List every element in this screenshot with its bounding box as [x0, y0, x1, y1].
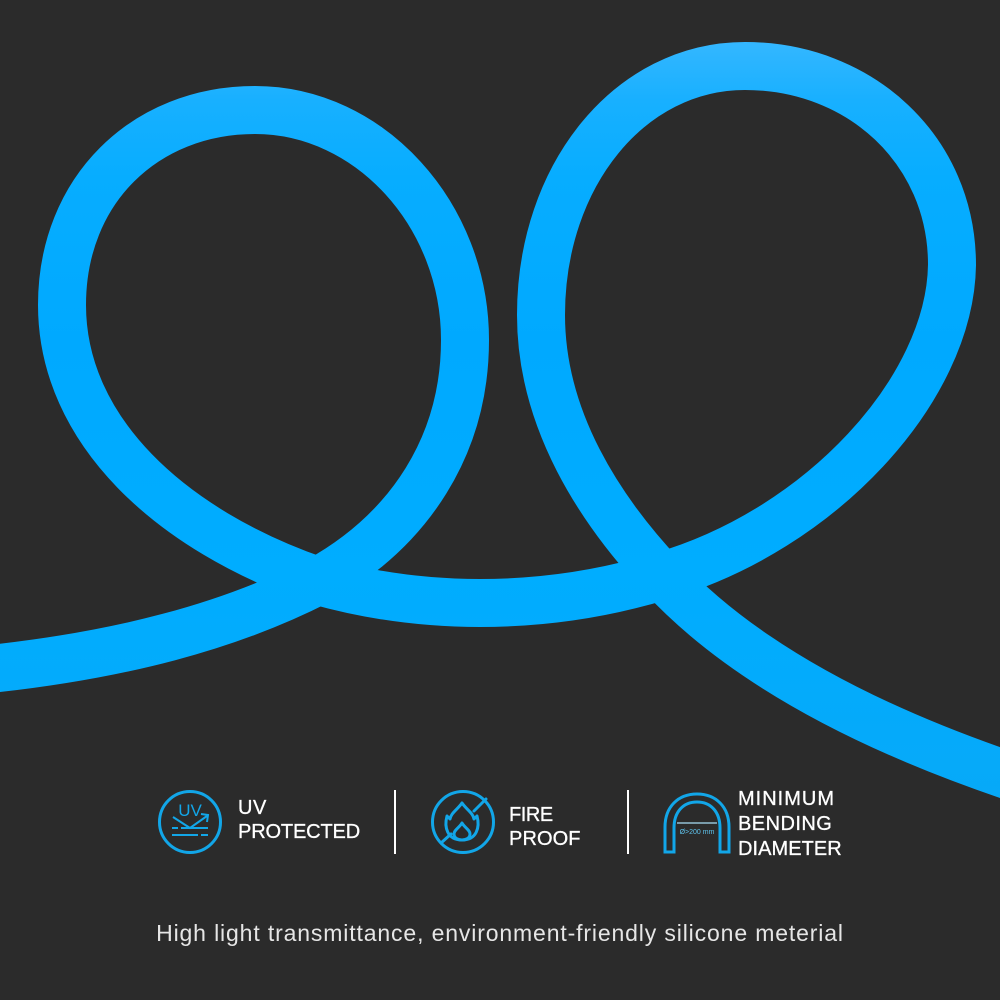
icon: crossed-out flame — [432, 792, 494, 852]
icon: UV protection — [160, 792, 220, 852]
label: minimum bending diameter: BENDING — [738, 813, 832, 835]
label: fire proof: PROOF — [509, 828, 581, 850]
feature: fire proof — [432, 792, 581, 852]
icon: UV protection: UV — [178, 801, 202, 820]
divider — [627, 790, 629, 854]
label: UV protected: UV — [238, 797, 267, 819]
label: minimum bending diameter: DIAMETER — [738, 838, 842, 860]
caption: High light transmittance, environment-friendly silicone meterial — [156, 920, 844, 946]
label: UV protected: PROTECTED — [238, 821, 360, 843]
label: minimum bending diameter: MINIMUM — [738, 788, 835, 810]
icon: bend arch — [665, 794, 729, 852]
icon: bend arch: Ø>200 mm — [680, 829, 715, 836]
divider — [394, 790, 396, 854]
neon strip looping in two circles — [0, 66, 1000, 776]
feature: minimum bending diameter — [665, 788, 842, 860]
label: fire proof: FIRE — [509, 804, 553, 826]
feature: UV protected — [160, 792, 360, 852]
